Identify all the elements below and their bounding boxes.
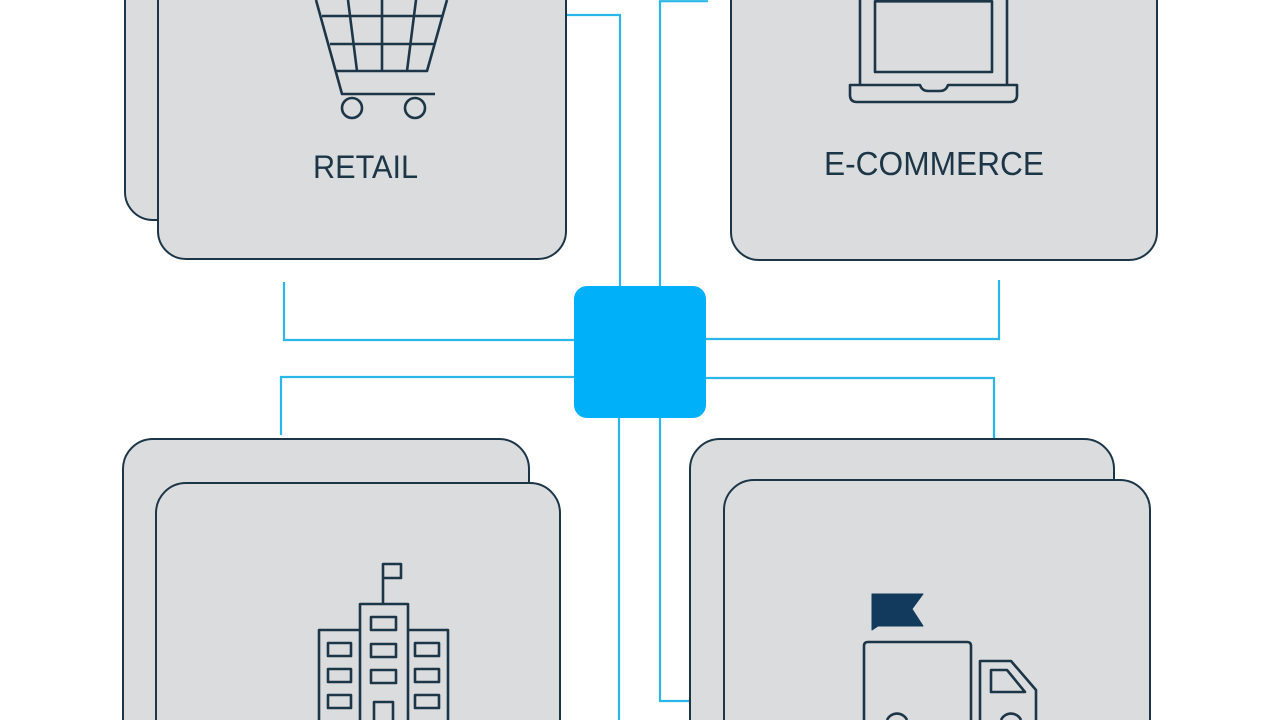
e-commerce label: E-COMMERCE bbox=[824, 145, 1044, 182]
panel: e-commerce bbox=[731, 0, 1157, 260]
icon: laptop bbox=[850, 0, 1017, 102]
e-commerce card bbox=[731, 0, 1157, 260]
icon: shopping cart bbox=[316, 0, 447, 118]
panel: logistics truck bbox=[690, 439, 1150, 720]
icon: delivery truck bbox=[864, 594, 1036, 720]
panel: corporate building bbox=[123, 439, 560, 720]
central hub square bbox=[574, 286, 706, 418]
retail back card bbox=[125, 0, 300, 220]
building back card bbox=[123, 439, 529, 720]
panel: retail bbox=[125, 0, 566, 259]
retail label: RETAIL bbox=[313, 149, 418, 185]
building front card bbox=[156, 483, 560, 720]
retail front card bbox=[158, 0, 566, 259]
icon: office building bbox=[319, 564, 448, 720]
connector lines bbox=[281, 1, 999, 720]
truck back card bbox=[690, 439, 1114, 720]
truck front card bbox=[724, 480, 1150, 720]
